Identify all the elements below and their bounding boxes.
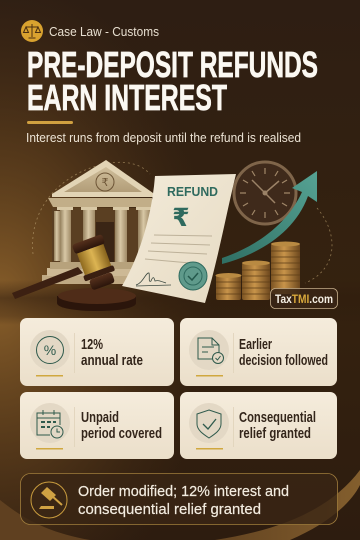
- icon: refund document: [122, 174, 236, 303]
- icon: gavel: [12, 234, 136, 311]
- category label: Case Law - Customs: [49, 25, 159, 39]
- callout text: consequential relief granted: [78, 501, 261, 518]
- card text: Earlier: [239, 337, 272, 353]
- icon: shield check: [197, 410, 221, 438]
- icon: percent: %: [44, 342, 56, 358]
- icon: coin stacks: [216, 242, 300, 300]
- icon: growth arrow: [222, 171, 317, 264]
- title: [27, 44, 318, 118]
- card text: period covered: [81, 426, 162, 442]
- signature: [136, 273, 171, 286]
- accent rule: [27, 121, 73, 124]
- callout text: Order modified; 12% interest and: [78, 483, 289, 500]
- document heading: REFUND: [167, 184, 218, 199]
- icon: court building: [42, 160, 154, 284]
- title: EARN INTEREST: [27, 77, 227, 118]
- icon: court building: ₹: [102, 176, 108, 189]
- subtitle: Interest runs from deposit until the refund is realised: [26, 131, 301, 145]
- card: earlier decision: [180, 318, 337, 386]
- icon: clock: [234, 162, 296, 224]
- card text: Unpaid: [81, 410, 119, 426]
- card: annual rate: [20, 318, 174, 386]
- icon: gavel badge: [31, 482, 67, 518]
- card text: relief granted: [239, 426, 311, 442]
- icon: document check: [198, 338, 224, 364]
- callout: order outcome: [20, 474, 338, 524]
- icon: percent: [36, 336, 64, 364]
- rupee symbol: ₹: [172, 203, 190, 232]
- card: consequential relief: [180, 392, 337, 459]
- card text: annual rate: [81, 353, 143, 369]
- brand badge: TaxTMI.com: [275, 292, 333, 306]
- illustration: [12, 160, 338, 311]
- card text: Consequential: [239, 410, 316, 426]
- icon: scales: [21, 20, 43, 42]
- brand badge: [270, 288, 338, 308]
- category badge: [21, 20, 159, 42]
- card text: decision followed: [239, 353, 328, 369]
- dotted arcs: [33, 162, 332, 283]
- card: unpaid period: [20, 392, 174, 459]
- stamp: [179, 262, 207, 290]
- card text: 12%: [81, 337, 103, 353]
- icon: calendar clock: [37, 410, 63, 438]
